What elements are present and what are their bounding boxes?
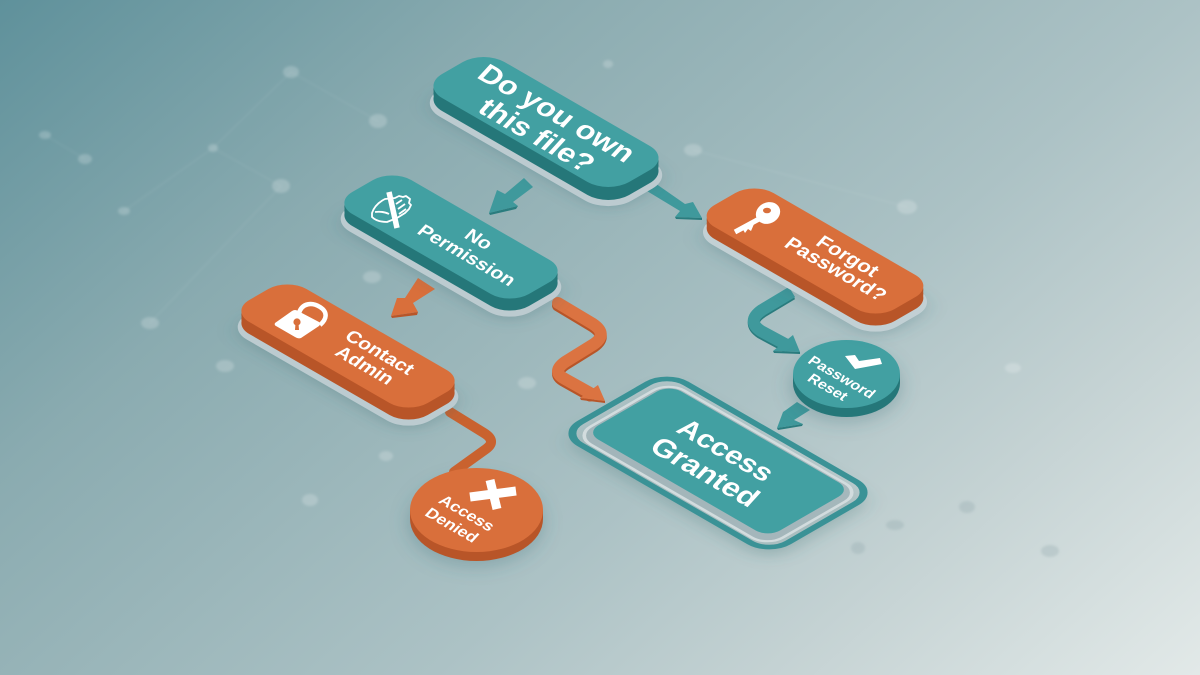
no permission surface	[333, 169, 569, 305]
icon: check mark	[845, 355, 882, 369]
access granted label: Granted	[643, 431, 766, 513]
password reset surface	[793, 340, 900, 408]
do you own surface	[421, 50, 671, 194]
do you own label: this file?	[472, 93, 601, 179]
arrow: forgot password to password reset	[754, 292, 800, 354]
node: contact admin	[225, 278, 471, 434]
forgot password surface	[695, 182, 935, 320]
access granted label: Access	[670, 413, 780, 488]
contact admin surface	[230, 278, 466, 414]
access denied label: Access	[435, 492, 498, 535]
icon: crossed hand	[372, 192, 411, 228]
contact admin label: Admin	[331, 343, 398, 389]
arrow: own file to no permission	[489, 178, 533, 215]
arrow: own file to forgot password	[642, 181, 702, 220]
node: forgot password	[690, 182, 940, 341]
arrow: no permission to contact admin	[391, 278, 435, 318]
access denied label: Denied	[421, 505, 482, 546]
no permission label: Permission	[413, 222, 520, 290]
node: no permission	[328, 169, 574, 326]
node: do you own this file	[416, 50, 676, 214]
no permission label: No	[460, 226, 497, 254]
node: access denied	[408, 412, 544, 566]
password reset label: Password	[804, 354, 878, 402]
contact admin label: Contact	[340, 327, 419, 379]
arrow: no permission to access granted	[558, 303, 605, 403]
forgot password label: Password?	[780, 234, 891, 306]
decorative network of dots	[39, 60, 1059, 557]
node: password reset	[790, 340, 902, 422]
access granted surface	[586, 384, 851, 538]
icon: key	[735, 198, 784, 233]
arrow: password reset to access granted	[777, 402, 810, 430]
access denied surface	[410, 468, 543, 552]
icon: padlock	[275, 304, 326, 338]
password reset label: Reset	[804, 372, 851, 404]
access denied label	[421, 492, 498, 546]
node: access granted	[561, 372, 875, 562]
do you own label: Do you own	[471, 59, 642, 168]
icon: x mark	[470, 480, 516, 509]
forgot password label: Forgot	[811, 232, 883, 281]
arrow: contact admin to access denied	[450, 412, 491, 472]
